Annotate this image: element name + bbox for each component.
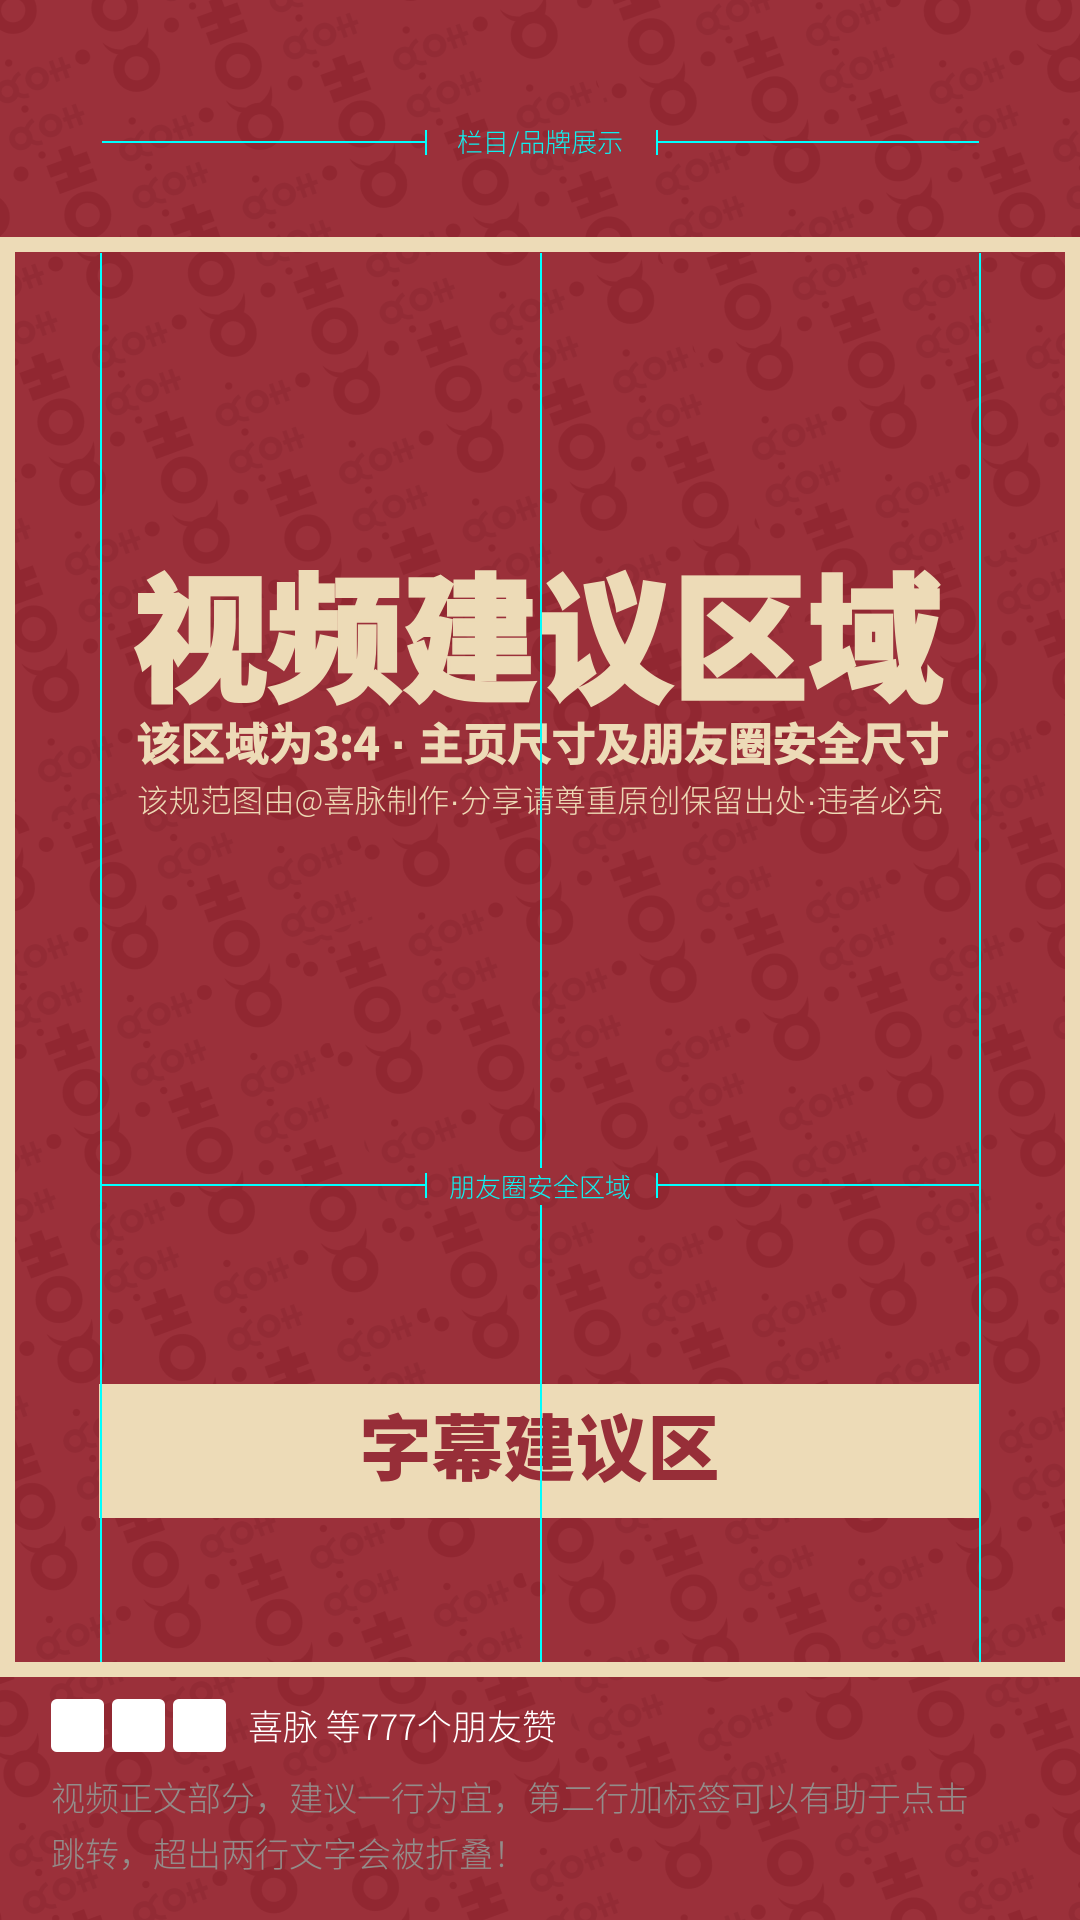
panel: caption suggestion strip — [99, 1384, 980, 1518]
text block: body copy: 跳转，超出两行文字会被折叠！ — [51, 1828, 527, 1877]
heading: column and brand label: 栏目/品牌展示 — [457, 123, 623, 160]
text block: body copy — [51, 1772, 969, 1877]
subtitle: safe size note: 该区域为3:4 · 主页尺寸及朋友圈安全尺寸 — [137, 709, 949, 773]
icon: avatars — [51, 1699, 226, 1752]
text block: copyright note: 该规范图由@喜脉制作·分享请尊重原创保留出处·违者必究 — [137, 776, 943, 822]
label: moments safe area: 朋友圈安全区域 — [449, 1168, 631, 1205]
text block: likes: 喜脉 等777个朋友赞 — [248, 1700, 557, 1751]
heading: caption suggestion: 字幕建议区 — [359, 1391, 720, 1496]
text block: body copy: 视频正文部分，建议一行为宜，第二行加标签可以有助于点击 — [51, 1772, 969, 1821]
panel: cream video frame — [0, 237, 1080, 1677]
